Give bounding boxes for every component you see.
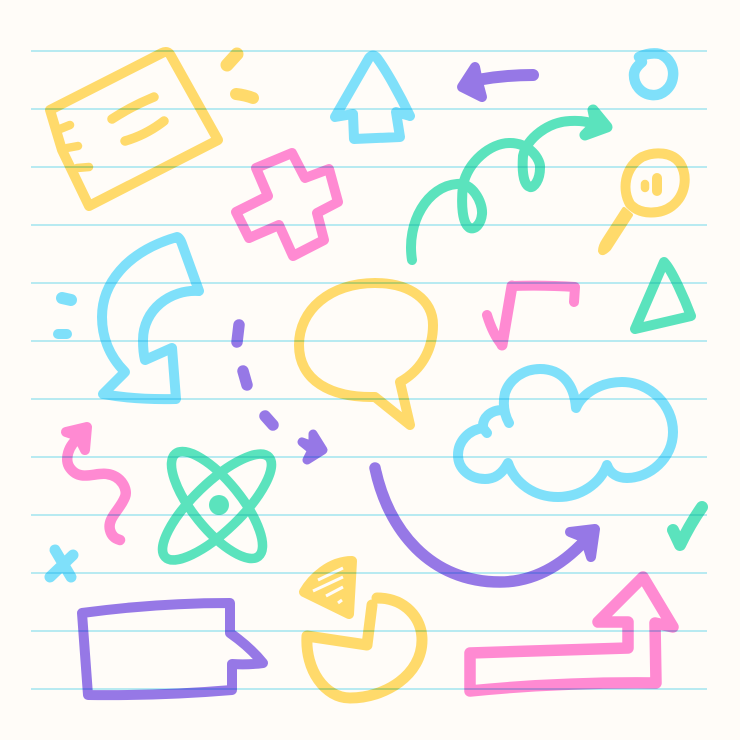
- icon: green atom: [149, 439, 285, 574]
- speech bubble: yellow: [299, 283, 433, 425]
- icon: yellow spark dashes: [227, 54, 253, 98]
- icon: blue up arrow: [335, 56, 410, 139]
- icon: green check mark: [673, 507, 702, 545]
- arrow: pink squiggle arrow: [66, 427, 126, 540]
- arrow: pink bent block arrow: [470, 577, 673, 691]
- speech bubble: purple rectangular: [82, 603, 263, 695]
- icon: yellow notepad: [50, 52, 218, 206]
- arrow: blue curved block arrow: [102, 237, 199, 399]
- icon: blue dashes: [58, 298, 71, 334]
- icon: green triangle: [635, 262, 691, 329]
- icon: blue small cross: [50, 550, 73, 577]
- icon: blue ring: [634, 53, 673, 95]
- icon: yellow striped wedge: [304, 561, 352, 614]
- arrow: green spiral arrow: [411, 110, 607, 260]
- icon: pink square root sign: [487, 286, 575, 345]
- icon: blue cloud: [458, 369, 673, 497]
- icon: pink cross: [236, 153, 338, 256]
- ruled notebook lines: [31, 51, 707, 689]
- icon: yellow magnifier: [600, 153, 685, 253]
- arrow: purple dashed arrow: [237, 325, 323, 460]
- icon: yellow pie chart with slice removed: [307, 598, 422, 698]
- arrow: purple left arrow: [462, 67, 533, 97]
- arrow: purple curved arrow: [375, 468, 595, 582]
